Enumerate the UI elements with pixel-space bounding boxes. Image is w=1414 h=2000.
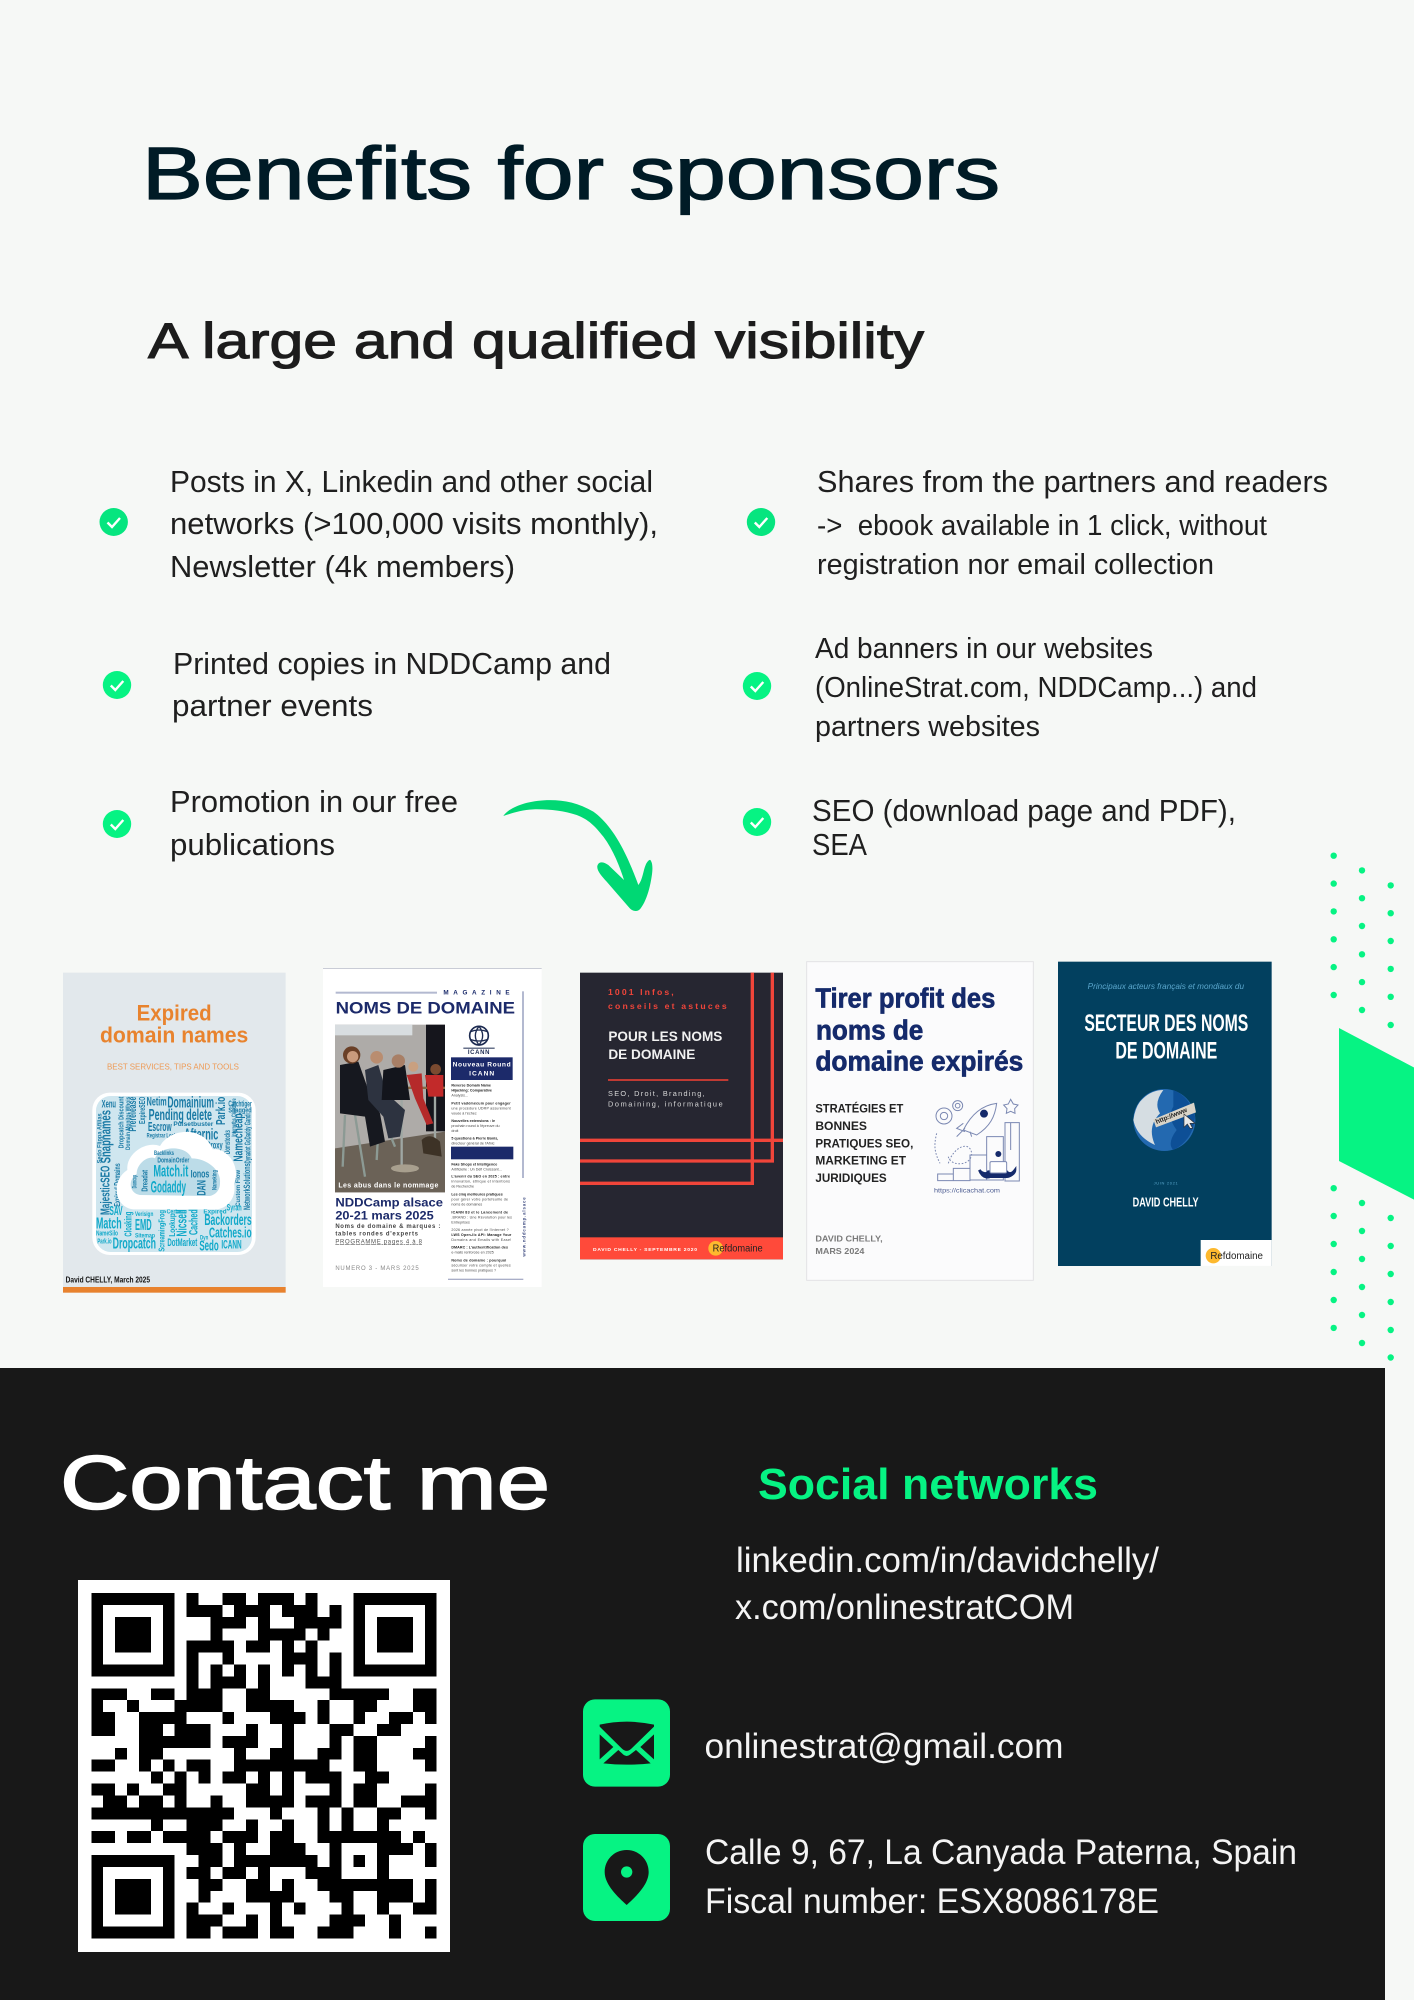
benefit: shares: -> ebook available in 1 click, without — [817, 510, 1267, 542]
benefit: ad banners: partners websites — [815, 711, 1040, 743]
magazine contents list: droit — [451, 1129, 458, 1133]
magazine contents list: prochain round à l'épreuve du — [451, 1124, 500, 1128]
globe with http://www tag: http://www — [1155, 1107, 1189, 1126]
word cloud: Expired — [203, 1208, 227, 1215]
cover: Tirer profit des noms de domaine expirés: STRATÉGIES ET — [815, 1100, 904, 1115]
magazine contents list: innovation, éthique et intentions — [451, 1180, 510, 1184]
cover: Tirer profit des noms de domaine expirés: DAVID CHELLY, — [815, 1234, 883, 1244]
magazine contents list: Hijacking: Comparative — [451, 1089, 492, 1093]
magazine contents list: Entreprises — [451, 1220, 470, 1224]
word cloud: Dreadat — [139, 1170, 149, 1192]
benefit: SEO and SEA: SEO (download page and PDF), — [812, 793, 1236, 828]
magazine contents list: Noms de domaine : pourquoi — [451, 1258, 506, 1262]
word cloud: Prerelease — [127, 1097, 139, 1132]
word cloud: Internetbs Cloudflare — [231, 1098, 238, 1137]
word cloud: SAV — [109, 1203, 123, 1218]
heading: Contact me: Contact me — [60, 1441, 550, 1526]
magazine contents list: noms de domaines — [451, 1202, 482, 1206]
word cloud: DotMarket — [167, 1237, 197, 1249]
word cloud: Pulsetbuster — [173, 1121, 214, 1128]
cover: Tirer profit des noms de domaine expirés: MARS 2024 — [815, 1246, 865, 1256]
cover: Tirer profit des noms de domaine expirés — [807, 962, 1033, 1280]
photo: panel on stage — [335, 1025, 445, 1192]
word cloud: DAN — [195, 1180, 209, 1196]
magazine contents list: 2026 année pivot de l'internet ? — [451, 1228, 509, 1232]
logo: Refdomaine — [1201, 1240, 1272, 1266]
word cloud: Cerbero — [167, 1209, 187, 1215]
word cloud: Nameking — [212, 1170, 219, 1190]
word cloud: Lookup — [168, 1213, 177, 1237]
benefit: social posts: Newsletter (4k members) — [170, 549, 515, 584]
word cloud: Godaddy — [151, 1178, 186, 1197]
word cloud: Registrar Lookup — [147, 1133, 182, 1139]
cover: 1001 Infos: DAVID CHELLY - SEPTEMBRE 2020 — [593, 1247, 697, 1253]
cover: Expired domain names: BEST SERVICES, TIPS AND TOOLS — [107, 1061, 239, 1071]
logo: Refdomaine — [708, 1241, 763, 1256]
word cloud: Cached — [186, 1209, 200, 1235]
word cloud: Cloaking — [124, 1212, 135, 1237]
decorative dot pattern and green shape — [1330, 852, 1414, 1361]
word cloud: Dynadot GoDaddy Gandi — [244, 1113, 253, 1163]
icon: location pin — [583, 1834, 670, 1921]
word cloud: Custom Flow — [235, 1169, 242, 1207]
benefit: SEO and SEA: SEA — [812, 827, 867, 862]
word cloud: Domainium — [167, 1094, 214, 1111]
globe with http://www tag — [1133, 1089, 1196, 1151]
postal address and fiscal number — [705, 1833, 1297, 1921]
word cloud: Sedo Flippa Afilias — [97, 1113, 104, 1163]
cover: Secteur des noms de domaine — [1058, 962, 1272, 1266]
illustration: rocket and buildings — [935, 1099, 1019, 1181]
word cloud: ICANN — [221, 1237, 242, 1251]
word cloud: Afternic — [184, 1126, 219, 1143]
cover: Tirer profit des noms de domaine expirés: https://clicachat.com — [934, 1187, 1000, 1194]
cover: Noms de domaine magazine — [323, 968, 542, 1287]
word cloud: Match — [96, 1215, 122, 1232]
icon: hand-drawn arrow — [503, 800, 652, 911]
cover: Tirer profit des noms de domaine expirés: JURIDIQUES — [815, 1171, 887, 1185]
benefit: free publications: Promotion in our free — [170, 784, 458, 819]
word cloud: Backlinks — [154, 1151, 174, 1157]
cover: 1001 Infos: conseils et astuces — [608, 1001, 727, 1011]
word cloud: NameSilo — [96, 1229, 118, 1238]
cover: Secteur des noms de domaine: Principaux acteurs français et mondiaux du — [1088, 982, 1245, 991]
cover: Noms de domaine magazine: NOMS DE DOMAINE — [336, 998, 515, 1017]
benefit: printed copies — [103, 646, 611, 723]
cover: Noms de domaine magazine: Nouveau Round — [453, 1062, 511, 1069]
people — [340, 1062, 385, 1147]
benefit: shares: Shares from the partners and readers — [817, 464, 1328, 499]
word cloud: Match.it — [153, 1162, 189, 1181]
magazine contents list: de Recherche — [451, 1185, 474, 1189]
cover: Secteur des noms de domaine: DE DOMAINE — [1115, 1038, 1217, 1065]
word cloud: Proxy — [207, 1140, 223, 1151]
word cloud: Snapnames — [99, 1110, 115, 1163]
magazine contents list: DMARC : L'authentification des — [451, 1245, 508, 1249]
cover: Noms de domaine magazine: PROGRAMME pages 4 à 8 — [335, 1239, 423, 1245]
word cloud: Park.io — [214, 1096, 228, 1125]
subtitle: A large and qualified visibility — [148, 313, 924, 369]
magazine contents list: Analysis... — [451, 1094, 468, 1098]
panel: contact — [0, 1368, 1385, 2000]
cover: Noms de domaine magazine: tables rondes d'experts — [335, 1232, 419, 1238]
benefit: shares — [747, 464, 1328, 581]
magazine contents list: Domains and Emails with Ease! — [451, 1238, 511, 1242]
word cloud: Ionos — [191, 1168, 209, 1180]
word cloud: Dropcatch — [113, 1235, 156, 1252]
word cloud: NetworkSolutions — [242, 1163, 252, 1210]
word cloud: Park.io — [97, 1236, 112, 1245]
heading: Social networks: Social networks — [758, 1460, 1098, 1509]
cover: Noms de domaine magazine: ICANN — [469, 1070, 494, 1077]
benefit: SEO and SEA — [743, 793, 1236, 862]
word cloud: Catchtiger — [228, 1100, 252, 1109]
cover: 1001 Infos: Domaining, informatique — [608, 1099, 723, 1108]
word cloud: Sitemap — [135, 1233, 155, 1239]
social links: linkedin.com/in/davidchelly/ — [736, 1541, 1159, 1580]
cover: 1001 Infos: POUR LES NOMS — [608, 1028, 722, 1044]
word cloud: Xenu — [102, 1098, 116, 1110]
word cloud: Domstocks — [223, 1130, 232, 1154]
word cloud: Domcop — [133, 1175, 139, 1188]
cover: Noms de domaine magazine: 20-21 mars 2025 — [335, 1208, 434, 1222]
postal address and fiscal number: Calle 9, 67, La Canyada Paterna, Spain — [705, 1833, 1297, 1872]
cover: Tirer profit des noms de domaine expirés: Tirer profit des — [815, 982, 995, 1013]
benefit: shares: registration nor email collection — [817, 549, 1214, 581]
magazine contents list: Artificielle : Un Défi Croissant... — [451, 1167, 502, 1171]
magazine contents list: sont les bonnes pratiques ? — [451, 1268, 496, 1272]
word cloud: Namecheap — [231, 1113, 246, 1162]
cover: Tirer profit des noms de domaine expirés: MARKETING ET — [815, 1154, 906, 1168]
word cloud: ScreamingFrog — [157, 1210, 167, 1252]
magazine contents list: ICANN 83 et le Lancement de — [451, 1210, 508, 1214]
magazine contents list: Reverse Domain Name — [451, 1083, 491, 1087]
word cloud: MajesticSEO — [97, 1166, 112, 1215]
word cloud: Nicsell — [175, 1209, 191, 1237]
word cloud — [92, 1093, 256, 1255]
benefit: social posts: networks (>100,000 visits monthly), — [170, 506, 658, 541]
social links — [735, 1541, 1159, 1627]
magazine contents list: L'avenir du SEO en 2025 : entre — [451, 1175, 510, 1179]
cover: Expired domain names: Expired — [137, 1001, 212, 1026]
benefit: ad banners: (OnlineStrat.com, NDDCamp...) and — [815, 672, 1257, 704]
cover: Noms de domaine magazine: MAGAZINE — [443, 990, 513, 997]
cover: 1001 Infos: SEO, Droit, Branding, — [608, 1089, 705, 1098]
magazine contents list: LWS Open-llc API: Manage Your — [451, 1233, 512, 1237]
word cloud: DomainOrder — [157, 1156, 189, 1165]
word cloud: Backorders — [204, 1212, 252, 1229]
word cloud: ExpireSEO — [137, 1097, 147, 1124]
word cloud: EMD — [135, 1217, 152, 1234]
cover: 1001 Infos: 1001 Infos, — [608, 987, 674, 997]
word cloud: Dropcatch Discount — [116, 1096, 125, 1148]
cover: Noms de domaine magazine: NDDCamp alsace — [335, 1196, 443, 1210]
magazine contents list: e-mails renforcée en 2025 — [451, 1251, 494, 1255]
cover: Secteur des noms de domaine: SECTEUR DES NOMS — [1084, 1010, 1248, 1037]
word cloud: Verisign — [135, 1211, 153, 1218]
social links: x.com/onlinestratCOM — [735, 1588, 1074, 1627]
benefit: ad banners: Ad banners in our websites — [815, 633, 1153, 665]
postal address and fiscal number: Fiscal number: ESX8086178E — [705, 1882, 1159, 1921]
cover: Expired domain names: domain names — [100, 1022, 248, 1047]
word cloud: Pending delete — [149, 1107, 212, 1124]
cover: Expired domain names: David CHELLY, March 2025 — [66, 1275, 150, 1284]
magazine contents list: Petit vadémécum pour engager — [451, 1101, 511, 1105]
cover: Secteur des noms de domaine: JUIN 2021 — [1154, 1181, 1179, 1186]
magazine contents list: directeur général de l'Afnic — [451, 1142, 495, 1146]
cover: Noms de domaine magazine: www.nddcamp.alsace — [521, 1197, 526, 1258]
magazine contents list: .BRAND : Une Révolution pour les — [451, 1215, 512, 1219]
benefit: printed copies: Printed copies in NDDCamp and — [173, 646, 611, 681]
magazine contents list: sécuriser votre compte et quelles — [451, 1263, 511, 1267]
benefit list — [100, 464, 1328, 862]
magazine contents list: Fake Shops et Intelligence — [451, 1162, 497, 1166]
cover: 1001 Infos: DE DOMAINE — [608, 1046, 695, 1062]
magazine contents list: pour gérer votre portefeuille de — [451, 1197, 508, 1201]
title: Benefits for sponsors — [142, 132, 1000, 215]
magazine contents list: vouée à l'échec — [451, 1111, 477, 1115]
QR code — [78, 1580, 450, 1952]
word cloud: Expired Domains — [113, 1163, 122, 1207]
magazine contents list: Les cinq meilleures pratiques — [451, 1192, 503, 1196]
benefit: social posts: Posts in X, Linkedin and other social — [170, 464, 653, 499]
cover: Tirer profit des noms de domaine expirés: noms de — [816, 1014, 923, 1045]
cover: Tirer profit des noms de domaine expirés: BONNES — [815, 1119, 867, 1133]
logo: Refdomaine: Refdomaine — [1210, 1251, 1263, 1262]
magazine contents list: 5 questions à Pierre Bonis, — [451, 1137, 498, 1141]
cover: Secteur des noms de domaine: DAVID CHELLY — [1133, 1195, 1199, 1210]
word cloud: Netim — [147, 1094, 167, 1108]
cover: 1001 Infos — [580, 973, 783, 1259]
word cloud: Escrow — [148, 1120, 172, 1134]
photo: panel on stage: Les abus dans le nommage — [338, 1182, 438, 1189]
logo: Refdomaine: Refdomaine — [713, 1244, 763, 1255]
icon: ICANN globe — [463, 1026, 495, 1056]
benefit: free publications: publications — [170, 827, 335, 862]
word cloud: Syrah — [227, 1203, 242, 1213]
benefit: ad banners — [743, 633, 1257, 743]
cover: Noms de domaine magazine: NUMERO 3 - MARS 2025 — [335, 1266, 419, 1272]
icon: email — [583, 1699, 670, 1787]
word cloud: Domain Monitor Whois — [125, 1096, 132, 1150]
word cloud: Snagged — [228, 1106, 252, 1115]
word cloud: Dyn — [200, 1235, 209, 1241]
cover: Noms de domaine magazine: Noms de domaine & marques : — [335, 1224, 440, 1230]
icon: ICANN globe: ICANN — [468, 1050, 490, 1056]
cover: Tirer profit des noms de domaine expirés: PRATIQUES SEO, — [815, 1136, 913, 1150]
magazine contents list: une procédure UDRP assurément — [451, 1106, 511, 1110]
benefit: social posts — [100, 464, 658, 584]
cover: Tirer profit des noms de domaine expirés: domaine expirés — [815, 1046, 1023, 1077]
benefit: printed copies: partner events — [172, 688, 373, 723]
cover: Expired domain names — [63, 973, 286, 1293]
benefit: free publications — [103, 784, 458, 862]
word cloud: Sedo — [199, 1239, 219, 1255]
email address: onlinestrat@gmail.com — [704, 1727, 1064, 1766]
magazine contents list — [451, 1083, 512, 1272]
magazine contents list: Nouvelles extensions : le — [451, 1119, 495, 1123]
word cloud: Catches.io — [209, 1225, 252, 1241]
